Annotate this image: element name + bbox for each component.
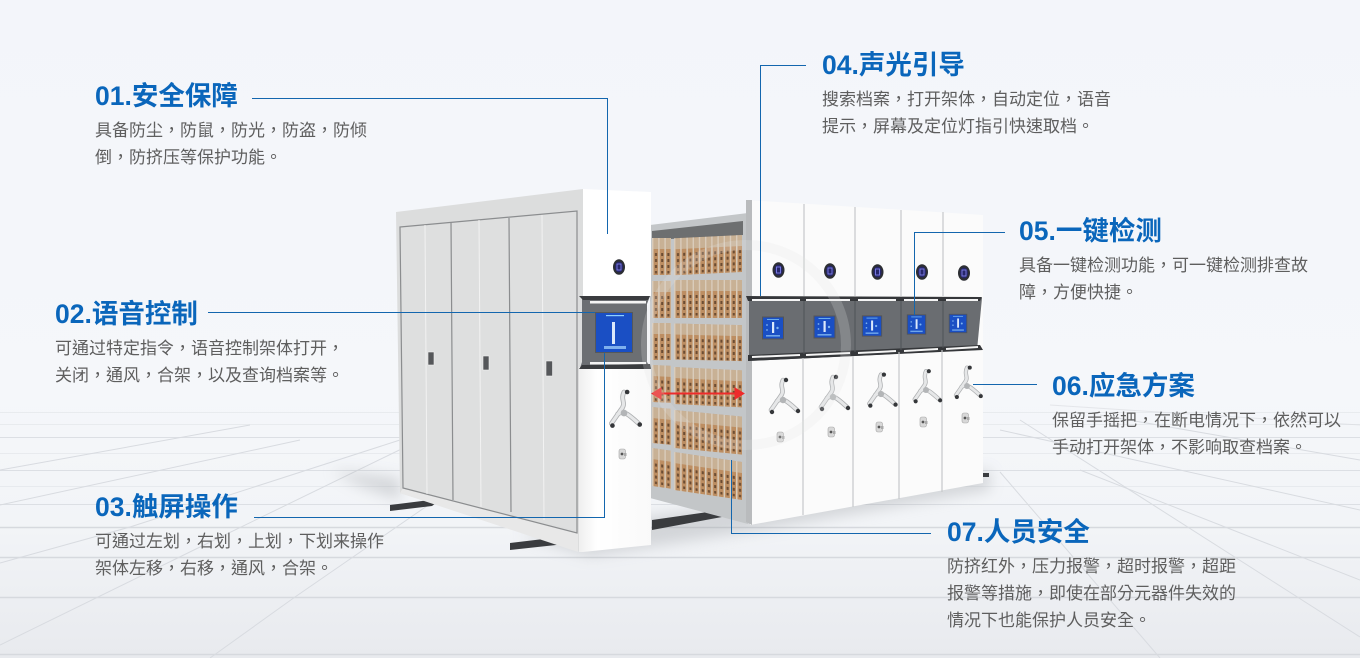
- text 05: [1019, 256, 1308, 302]
- floor shadows: [330, 470, 990, 556]
- icons: hand cranks: [770, 366, 983, 414]
- text 06: [1052, 411, 1341, 457]
- text 02: 关闭，通风，合架，以及查询档案等。: [55, 366, 344, 385]
- text 03: 可通过左划，右划，上划，下划来操作: [95, 532, 384, 551]
- text 04: 提示，屏幕及定位灯指引快速取档。: [822, 117, 1094, 136]
- text 05: 障，方便快捷。: [1019, 283, 1138, 302]
- heading 04: 04.声光引导: [822, 50, 965, 80]
- heading 07: 07.人员安全: [947, 517, 1090, 547]
- text 01: [95, 121, 367, 167]
- red two-way arrow: [652, 388, 744, 399]
- heading 05: 05.一键检测: [1019, 216, 1162, 246]
- text 02: [55, 339, 344, 385]
- text 01: 具备防尘，防鼠，防光，防盗，防倾: [95, 121, 367, 140]
- floor rails: [390, 473, 989, 550]
- text 04: [822, 90, 1111, 136]
- text 07: [947, 557, 1236, 630]
- callout 02: [55, 299, 344, 385]
- icons: touch screens: [762, 314, 967, 340]
- text 02: 可通过特定指令，语音控制架体打开，: [55, 339, 344, 358]
- heading 03: 03.触屏操作: [95, 492, 238, 522]
- text 01: 倒，防挤压等保护功能。: [95, 148, 282, 167]
- icons: number dials: [772, 262, 970, 281]
- callout 06: [1052, 371, 1341, 457]
- text 05: 具备一键检测功能，可一键检测排查故: [1019, 256, 1308, 275]
- text 07: 情况下也能保护人员安全。: [947, 611, 1151, 630]
- left cabinet end panel: [579, 189, 651, 552]
- left cabinet side panel with doors: [396, 189, 583, 552]
- heading 02: 02.语音控制: [55, 299, 198, 329]
- open shelving aisle with archive boxes: [650, 213, 748, 524]
- callout 03: [95, 492, 384, 578]
- callout 04: [822, 50, 1111, 136]
- text 06: 手动打开架体，不影响取查档案。: [1052, 438, 1307, 457]
- heading 01: 01.安全保障: [95, 81, 238, 111]
- icon: touch screen 01: [595, 312, 633, 353]
- text 03: [95, 532, 384, 578]
- text 07: 报警等措施，即使在部分元器件失效的: [947, 584, 1236, 603]
- heading 06: 06.应急方案: [1052, 371, 1195, 401]
- icon: hand crank 01: [610, 390, 642, 428]
- icon: number dial 01: [613, 259, 625, 275]
- text 07: 防挤红外，压力报警，超时报警，超距: [947, 557, 1236, 576]
- callout 01: [95, 81, 367, 167]
- text 03: 架体左移，右移，通风，合架。: [95, 559, 333, 578]
- callout 07: [947, 517, 1236, 630]
- callout 05: [1019, 216, 1308, 302]
- text 04: 搜索档案，打开架体，自动定位，语音: [822, 90, 1111, 109]
- icons: locks: [777, 413, 970, 442]
- text 06: 保留手摇把，在断电情况下，依然可以: [1052, 411, 1341, 430]
- leader lines: [208, 66, 1037, 534]
- watermark ring: [646, 245, 846, 445]
- right cabinet row: [746, 200, 983, 525]
- icon: lock 01: [619, 449, 626, 459]
